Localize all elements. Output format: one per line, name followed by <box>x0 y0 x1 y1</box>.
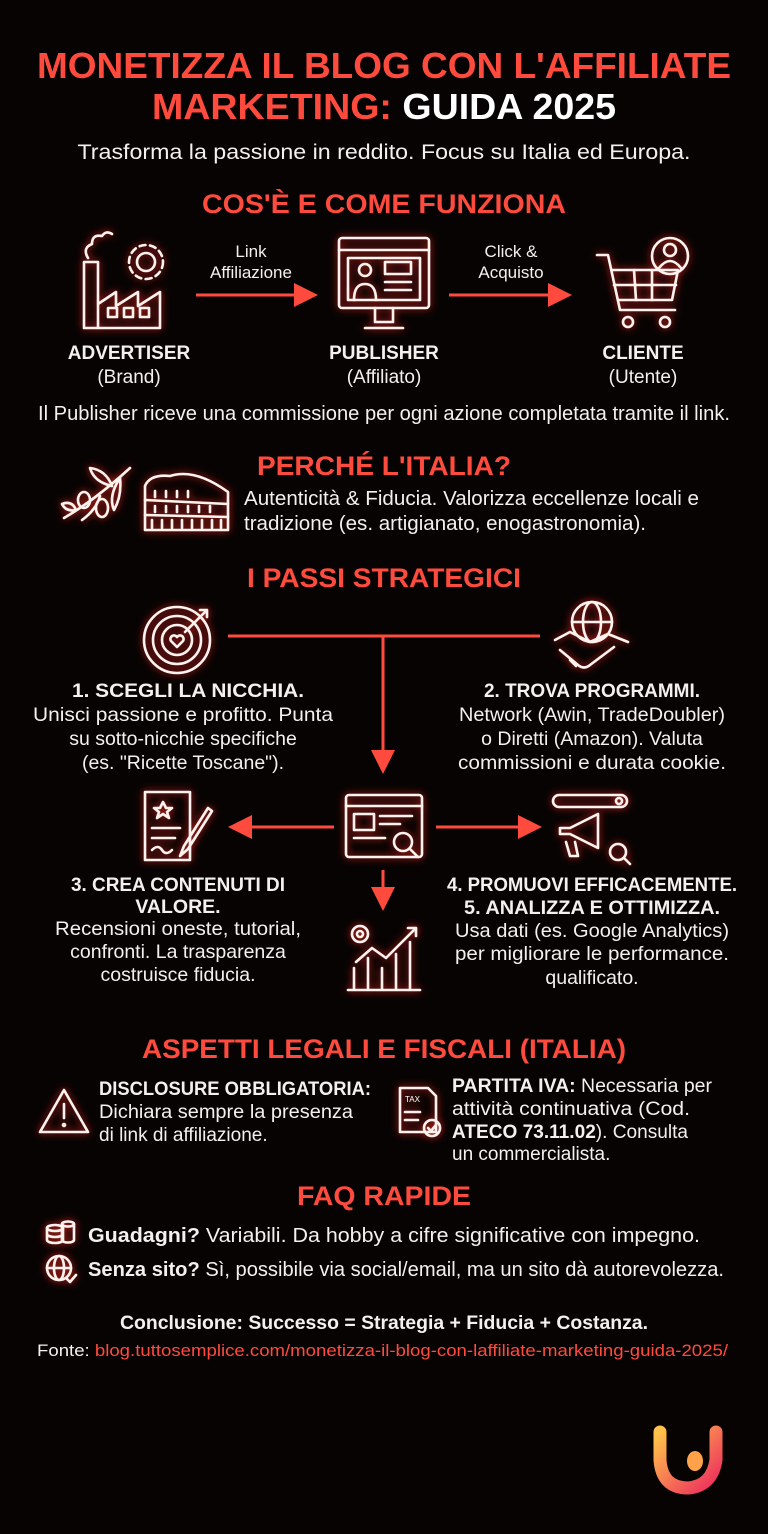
labels: roles: (Affiliato) <box>347 367 421 388</box>
icon: cart <box>597 238 688 327</box>
subtitle: Trasforma la passione in reddito. Focus su Italia ed Europa. <box>78 141 691 164</box>
title <box>37 45 731 127</box>
logo <box>660 1432 716 1488</box>
text: disclosure <box>99 1079 371 1146</box>
step 1: (es. "Ricette Toscane"). <box>82 752 284 774</box>
text: perché l'italia: Autenticità & Fiducia. Valorizza eccellenze locali e <box>244 488 699 510</box>
step 3: 3. CREA CONTENUTI DI <box>71 874 285 896</box>
heading: perché l'italia: PERCHÉ L'ITALIA? <box>257 450 511 481</box>
step 2: Network (Awin, TradeDoubler) <box>459 704 725 726</box>
step 1 <box>33 680 333 774</box>
icon: colosseum <box>145 474 228 530</box>
text: partita iva: un commercialista. <box>452 1144 610 1165</box>
text: disclosure: Dichiara sempre la presenza <box>99 1102 353 1123</box>
step 1: 1. SCEGLI LA NICCHIA. <box>72 680 304 702</box>
text: partita iva <box>452 1076 713 1165</box>
icon: olive branch <box>62 468 130 520</box>
icon: factory <box>84 232 163 328</box>
text: perché l'italia <box>244 488 699 535</box>
text: perché l'italia: tradizione (es. artigianato, enogastronomia). <box>244 513 646 535</box>
step 2 <box>458 680 726 774</box>
step 1: Unisci passione e profitto. Punta <box>33 704 333 726</box>
step 1: su sotto-nicchie specifiche <box>69 728 297 750</box>
step 3: Recensioni oneste, tutorial, <box>55 918 301 940</box>
arrows from center <box>234 827 536 905</box>
icon: content browser <box>346 795 422 857</box>
faq 2: Senza sito? Sì, possibile via social/email, ma un sito dà autorevolezza. <box>88 1259 724 1281</box>
step 3: costruisce fiducia. <box>101 964 255 986</box>
icon: chart gear <box>348 926 420 990</box>
icon: document pen <box>145 792 212 860</box>
text: commissione: Il Publisher riceve una commissione per ogni azione completata tramite il link. <box>38 403 730 425</box>
step 3: VALORE. <box>135 896 221 918</box>
step 4 and 5: 5. ANALIZZA E OTTIMIZZA. <box>464 897 720 919</box>
labels: roles: CLIENTE <box>602 343 684 364</box>
heading: faq: FAQ RAPIDE <box>297 1181 471 1211</box>
text: disclosure: di link di affiliazione. <box>99 1125 268 1146</box>
icon: target <box>144 607 210 673</box>
labels: roles: ADVERTISER <box>68 343 191 364</box>
step 3: confronti. La trasparenza <box>70 941 286 963</box>
step 4 and 5: 4. PROMUOVI EFFICACEMENTE. <box>447 874 737 896</box>
icon: globe handshake <box>555 602 628 668</box>
step 4 and 5: qualificato. <box>545 967 639 989</box>
arrow: click & acquisto <box>449 242 566 295</box>
arrow: link affiliazione: Affiliazione <box>210 263 292 282</box>
heading: i passi strategici: I PASSI STRATEGICI <box>247 563 521 593</box>
step 2: 2. TROVA PROGRAMMI. <box>484 680 700 702</box>
heading: cos'è e come funziona: COS'È E COME FUNZIONA <box>202 188 566 219</box>
step 3 <box>55 874 301 986</box>
flow lines <box>228 636 540 768</box>
text: partita iva: attività continuativa (Cod. <box>452 1099 690 1120</box>
step 4 and 5 <box>447 874 737 989</box>
title: MONETIZZA IL BLOG CON L'AFFILIATE <box>37 45 731 86</box>
arrow: click & acquisto: Acquisto <box>478 263 544 282</box>
labels: roles: (Utente) <box>609 367 677 388</box>
step 2: o Diretti (Amazon). Valuta <box>481 728 703 750</box>
icon: tax document: TAX <box>405 1095 421 1104</box>
labels: roles: PUBLISHER <box>329 343 439 364</box>
text: partita iva: ATECO 73.11.02). Consulta <box>452 1122 688 1143</box>
title: MARKETING: GUIDA 2025 <box>152 86 616 127</box>
faq 1: Guadagni? Variabili. Da hobby a cifre significative con impegno. <box>88 1225 700 1247</box>
step 4 and 5: Usa dati (es. Google Analytics) <box>455 920 729 942</box>
conclusion: Conclusione: Successo = Strategia + Fiducia + Costanza. <box>120 1312 648 1334</box>
step 4 and 5: per migliorare le performance. <box>455 943 729 965</box>
labels: roles <box>68 343 684 388</box>
icon: tax document <box>400 1088 440 1136</box>
labels: roles: (Brand) <box>97 367 161 388</box>
text: disclosure: DISCLOSURE OBBLIGATORIA: <box>99 1079 371 1100</box>
icon: publisher monitor <box>339 238 429 328</box>
icon: warning <box>40 1090 88 1132</box>
step 2: commissioni e durata cookie. <box>458 752 726 774</box>
source: Fonte: blog.tuttosemplice.com/monetizza-il-blog-con-laffiliate-marketing-guida-2025/ <box>37 1341 728 1360</box>
heading: aspetti legali: ASPETTI LEGALI E FISCALI (ITALIA) <box>142 1034 626 1064</box>
icon: megaphone search <box>553 795 630 864</box>
arrow: click & acquisto: Click & <box>485 242 538 261</box>
text: partita iva: PARTITA IVA: Necessaria per <box>452 1076 713 1097</box>
arrow: link affiliazione: Link <box>235 242 267 261</box>
arrow: link affiliazione <box>196 242 312 295</box>
